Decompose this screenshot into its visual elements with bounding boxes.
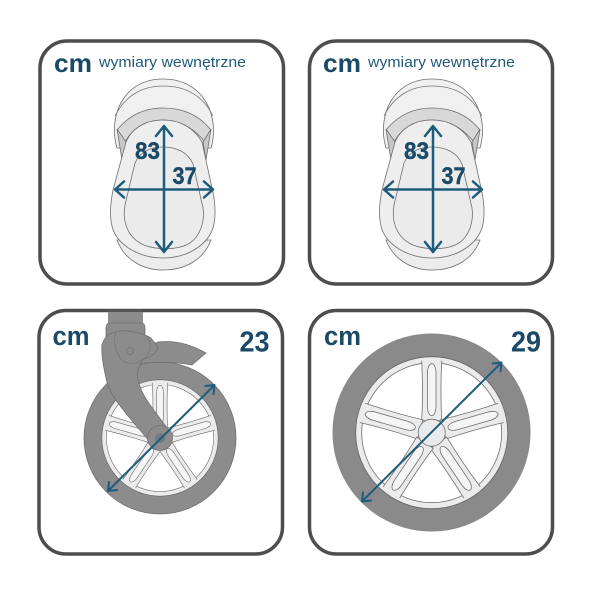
number: length 83: 83	[404, 138, 429, 165]
number: diameter 29: 29	[511, 326, 541, 358]
panel: rear wheel diameter	[310, 310, 552, 554]
arrow: width	[384, 182, 482, 198]
number: width 37: 37	[442, 163, 466, 190]
arrow: length	[156, 126, 172, 252]
heading: interior dimensions: wymiary wewnętrzne	[98, 54, 246, 71]
icon: rear wheel	[332, 334, 530, 532]
panel: carrycot interior dimensions, right	[310, 41, 552, 284]
arrow: length	[425, 126, 441, 252]
heading: unit cm: cm	[324, 323, 361, 351]
panel: carrycot interior dimensions, left	[40, 41, 284, 284]
icon: carrycot top view	[380, 79, 484, 270]
arrow: wheel diameter	[362, 362, 502, 502]
heading: interior dimensions: wymiary wewnętrzne	[367, 54, 515, 71]
number: width 37: 37	[172, 163, 196, 190]
heading: unit cm: cm	[52, 323, 90, 351]
arrow: width	[115, 182, 213, 198]
heading: unit cm: cm	[323, 48, 361, 78]
icon: carrycot top view	[111, 79, 215, 270]
number: diameter 23: 23	[240, 326, 270, 358]
number: length 83: 83	[135, 138, 160, 165]
icon: front wheel with fork	[84, 309, 236, 514]
panel: front wheel diameter	[39, 309, 282, 554]
arrow: wheel diameter	[108, 385, 214, 491]
heading: unit cm: cm	[54, 48, 92, 78]
